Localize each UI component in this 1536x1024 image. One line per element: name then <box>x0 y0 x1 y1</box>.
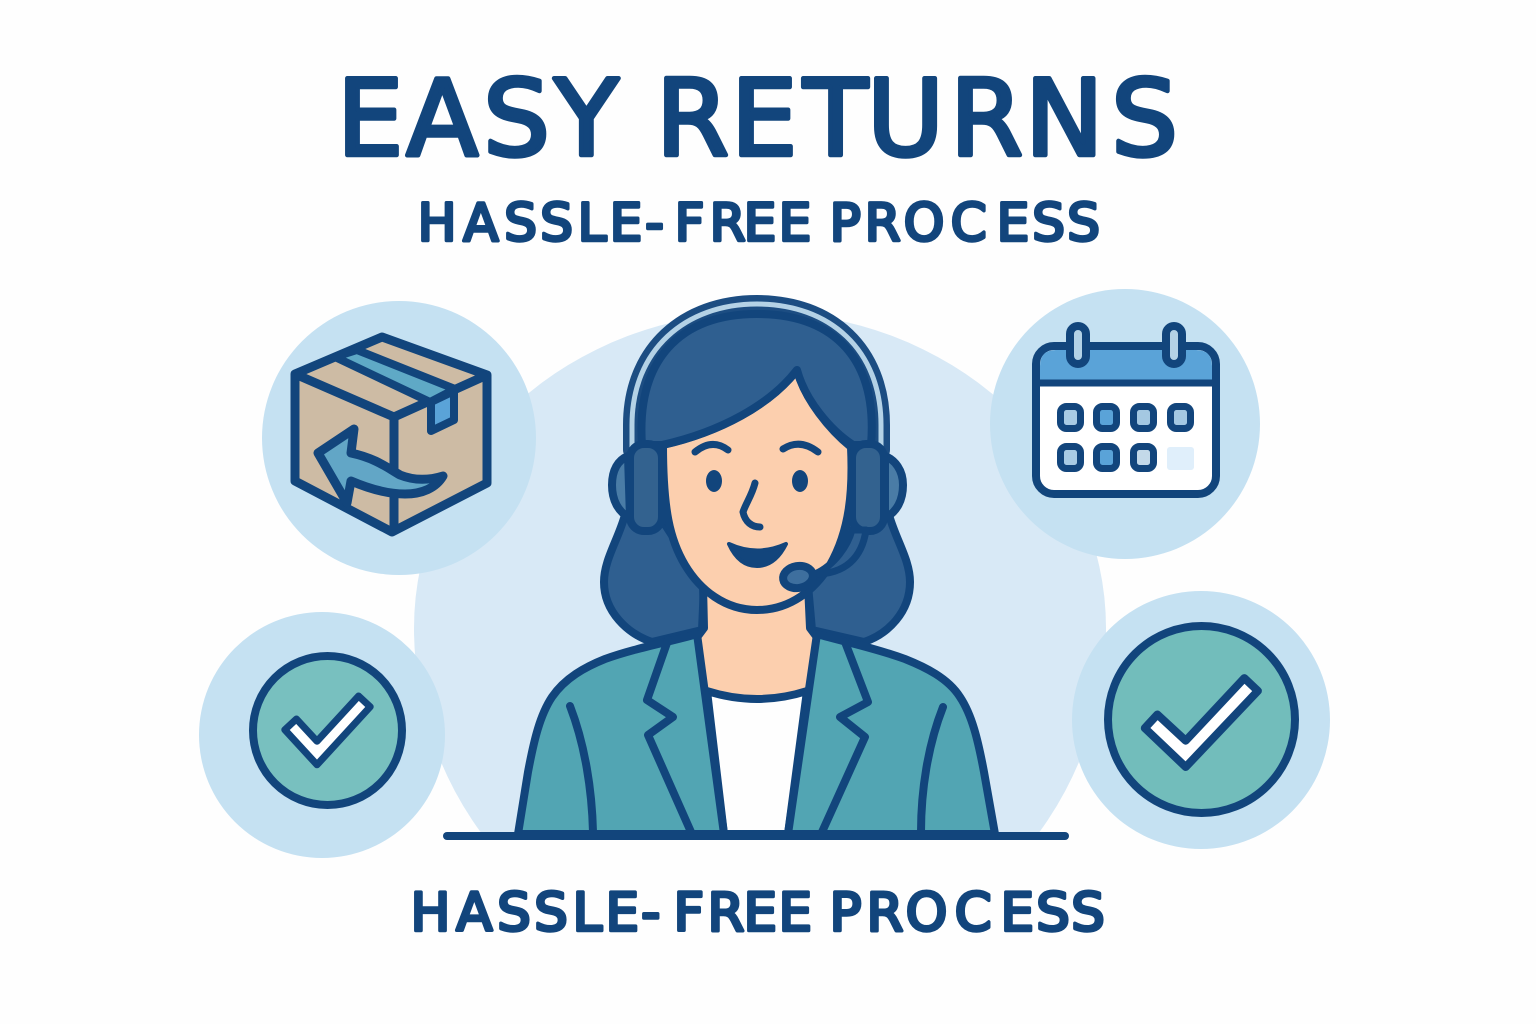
headset band <box>632 304 881 450</box>
box edges <box>295 374 487 532</box>
calendar body <box>1036 346 1216 494</box>
jacket <box>518 634 995 834</box>
upper hair <box>641 314 872 445</box>
icon: return package <box>262 301 536 575</box>
desk line <box>443 832 1069 840</box>
calendar day cells <box>1060 406 1190 468</box>
icon: calendar <box>990 289 1260 559</box>
checkmark <box>1145 678 1258 767</box>
icon: right check badge <box>1072 591 1330 849</box>
checkmark <box>285 696 370 765</box>
box body <box>295 337 487 532</box>
customer support agent <box>518 304 995 834</box>
calendar header <box>1040 350 1212 383</box>
jacket lapels and seams <box>570 640 943 832</box>
calendar rings <box>1070 326 1086 364</box>
box tape <box>335 350 455 402</box>
lower hair <box>604 515 910 642</box>
return arrow <box>318 429 443 503</box>
eyes <box>706 470 808 492</box>
icon: left check badge <box>199 612 445 858</box>
box tape flap <box>431 391 454 431</box>
infographic canvas <box>199 74 1330 933</box>
shirt <box>707 691 807 834</box>
title: EASY RETURNS <box>337 58 1178 180</box>
face <box>663 370 852 610</box>
mouth <box>729 544 786 566</box>
eyebrows <box>695 444 818 452</box>
headset ear cups <box>612 456 903 518</box>
subtitle: HASSLE-FREE PROCESS <box>418 193 1100 253</box>
headset microphone <box>815 530 866 574</box>
footer caption: HASSLE-FREE PROCESS <box>411 882 1105 943</box>
nose <box>743 483 760 527</box>
neck <box>698 580 816 699</box>
background circle behind agent <box>414 321 1106 832</box>
